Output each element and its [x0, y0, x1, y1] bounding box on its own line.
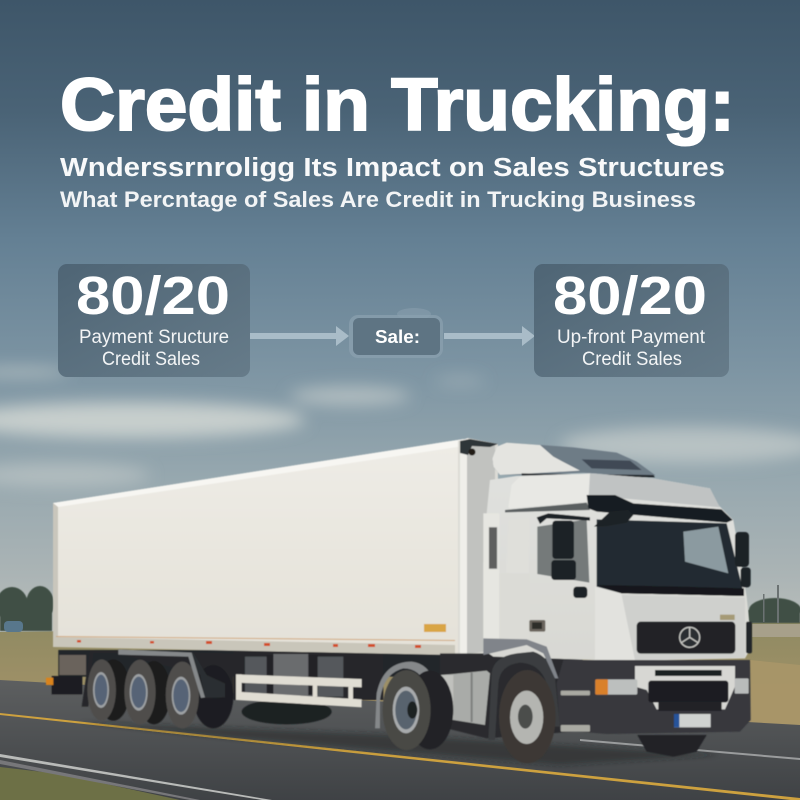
- trailer marker lights: [77, 640, 421, 648]
- panel: up-front payment: [534, 264, 729, 377]
- mudguard: [118, 649, 225, 698]
- front wheel: [499, 670, 556, 763]
- side window: [537, 519, 589, 583]
- trailer box: [53, 439, 464, 655]
- licence plate: [674, 714, 711, 727]
- label: sale: Sale:: [375, 327, 420, 347]
- tool boxes and tanks: [245, 654, 343, 697]
- visor: [587, 495, 733, 523]
- mirrors: [537, 510, 751, 598]
- title: Credit in Trucking:: [60, 63, 735, 146]
- cab steps: [561, 691, 590, 732]
- front bumper: [557, 660, 751, 734]
- roof deflector: [492, 443, 655, 477]
- label: credit sales left: Credit Sales: [102, 349, 200, 370]
- cab body: [483, 473, 752, 661]
- stat: 80/20 left: 80/20: [76, 266, 230, 326]
- arrow: structure to sale: [250, 326, 349, 346]
- trailer logo mark: [424, 624, 446, 632]
- drive wheel: [375, 662, 453, 750]
- label: payment structure: Payment Sructure: [79, 327, 229, 348]
- trailer undercarriage: [46, 649, 458, 728]
- truck: [46, 438, 752, 765]
- label: up-front payment: Up-front Payment: [557, 327, 706, 348]
- stat: 80/20 right: 80/20: [553, 266, 707, 326]
- panel: payment structure: [58, 264, 250, 377]
- arrow: sale to up-front payment: [444, 326, 535, 346]
- fuel tank: [440, 671, 490, 725]
- label: credit sales right: Credit Sales: [582, 349, 682, 370]
- rear wheels: [87, 659, 233, 728]
- trailer front post and side panel: [458, 438, 498, 654]
- side guard rail: [236, 674, 362, 707]
- landscape: fields, trees and road: [0, 585, 800, 800]
- secondary subtitle: What Percntage of Sales Are Credit in Trucking Business: [60, 187, 696, 212]
- grille and emblem: [637, 615, 735, 654]
- cab chassis backdrop: [440, 653, 593, 738]
- panel: sale: [349, 308, 443, 358]
- cab wheel arch: [488, 652, 560, 740]
- windshield: [597, 519, 744, 596]
- subtitle: Wnderssrnroligg Its Impact on Sales Structures: [60, 154, 725, 182]
- ground shadow: [80, 722, 720, 765]
- front right wheel: [637, 735, 707, 757]
- clouds: [0, 368, 800, 487]
- headlights: [595, 678, 749, 695]
